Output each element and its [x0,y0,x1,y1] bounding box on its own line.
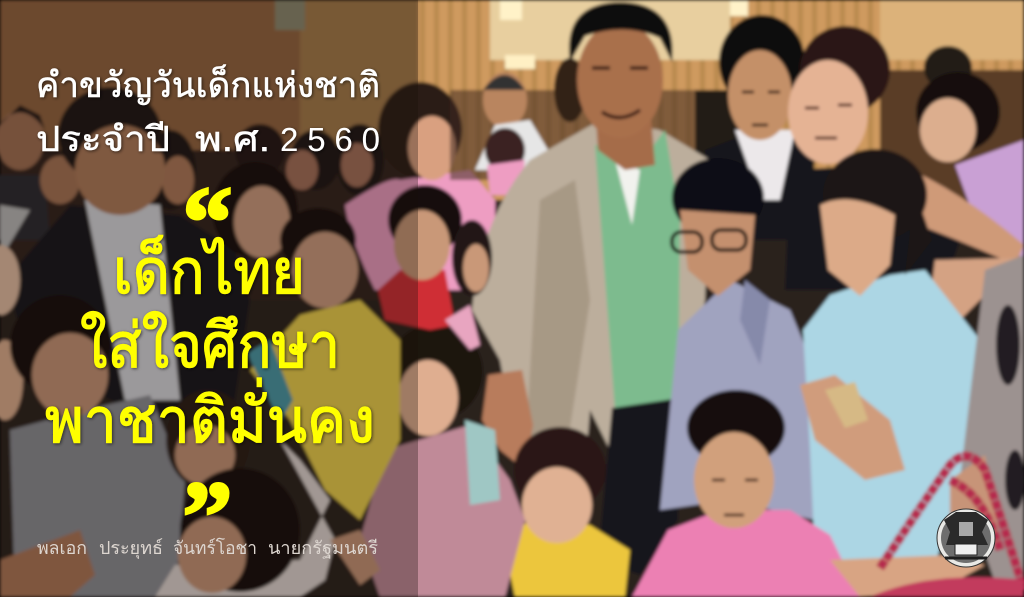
woman black top [785,165,960,290]
boy in grey shirt [10,395,185,597]
emblem seal [937,509,995,567]
attribution: ประยุทธ์ [99,538,163,559]
red rope bag [880,456,1024,590]
left edge pale shapes [0,205,30,260]
little boy in pink [632,510,860,597]
girl in blue [803,270,980,570]
patterned person far right [960,255,1024,597]
heading: 2560 [280,121,380,158]
slogan [45,235,375,456]
boy in red [378,270,455,330]
attribution: พลเอก [37,538,87,558]
woman smiling [212,162,298,258]
man behind [705,125,815,240]
prime minister jacket [472,120,710,470]
background crowd left [0,150,418,300]
slogan: พาชาติมั่นคง [45,378,375,456]
toddler in yellow [503,520,630,597]
man in dark jacket [5,205,250,420]
girl with glasses [445,305,480,350]
girl head bottom [166,390,250,490]
heading: พ.ศ. [195,120,270,159]
boy with yellow shirt [250,300,400,520]
heading: ประจำปี [36,120,170,159]
heading: คำขวัญวันเด็กแห่งชาติ [36,64,380,105]
boy with glasses [660,280,815,520]
slogan: ใส่ใจศึกษา [80,311,340,381]
girl with pink dress [360,425,525,597]
attribution: จันทร์โอชา [173,537,257,558]
closing quote mark: ” [182,461,232,572]
heading [36,64,380,159]
green vest and trousers [595,130,680,410]
opening quote mark: “ [182,166,232,277]
attribution: นายกรัฐมนตรี [268,538,378,559]
attribution [37,537,378,559]
slogan: เด็กไทย [113,235,305,307]
woman at far right lilac [955,140,1024,260]
prime minister head [595,105,655,170]
dark overlay on left side [0,0,418,597]
woman in pink [345,170,495,290]
background crowd right [450,90,710,180]
